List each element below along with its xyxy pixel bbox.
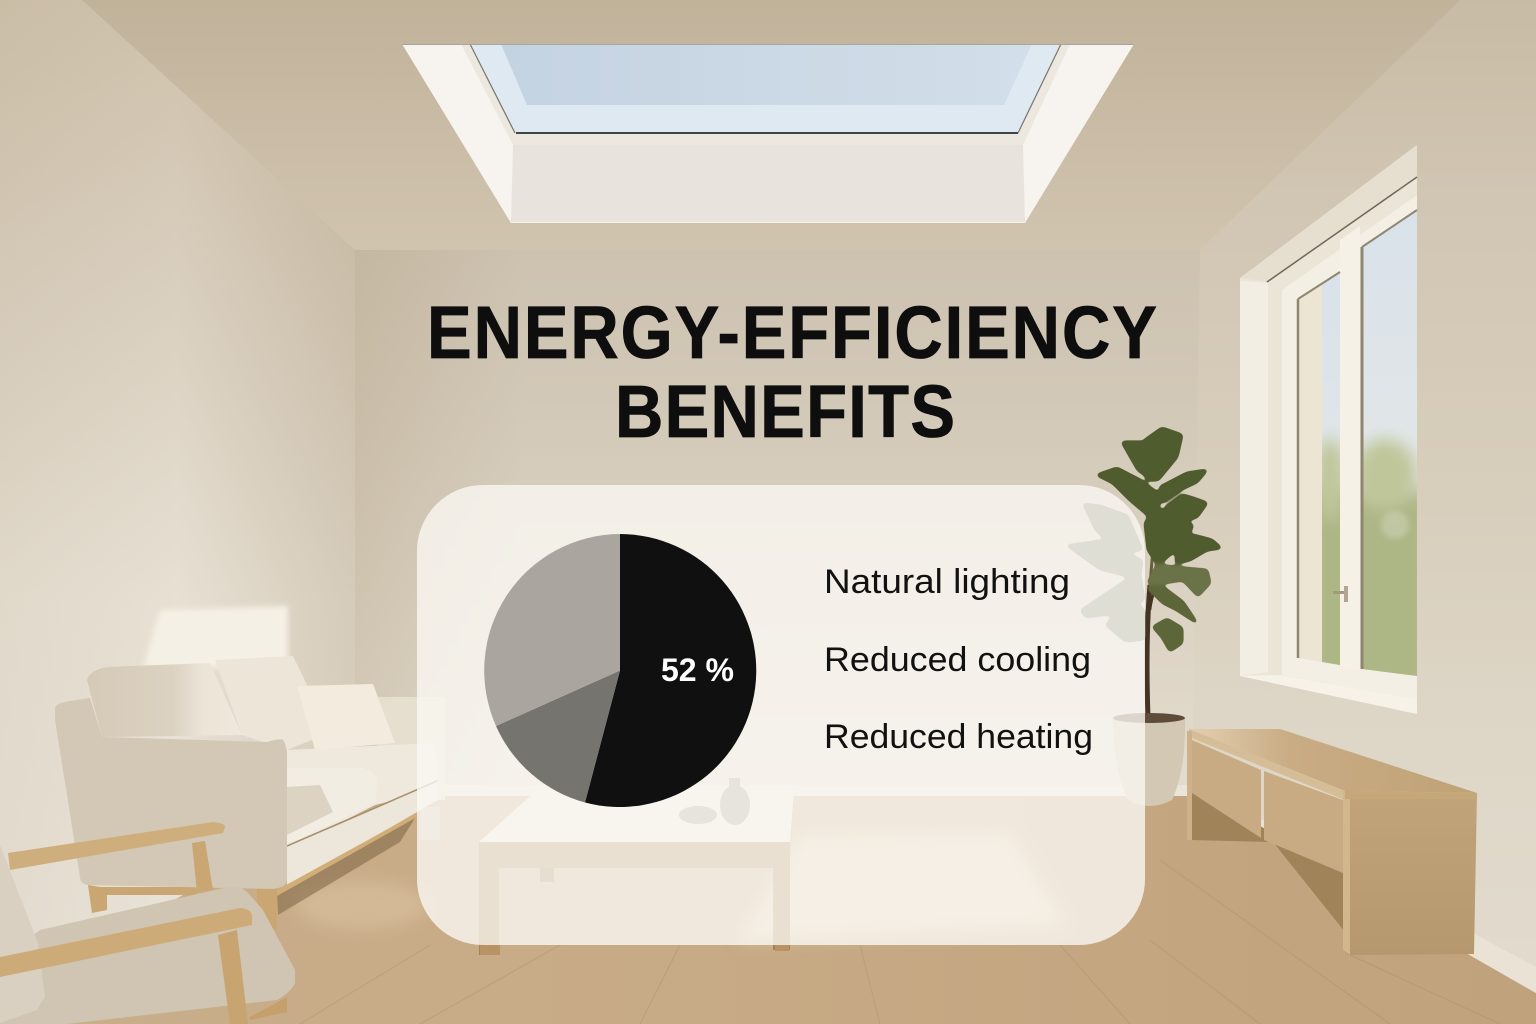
fiddle leaves (1097, 428, 1221, 651)
legend labels: Reduced cooling (824, 641, 1091, 679)
panel: translucent chart card (417, 485, 1145, 945)
legend labels: Natural lighting (824, 563, 1070, 601)
armchair (0, 822, 295, 1024)
side window (1240, 145, 1430, 714)
coffee table (479, 778, 794, 955)
room: right wall (1192, 0, 1536, 993)
title (427, 291, 1159, 453)
pie chart: 52 % (661, 652, 734, 688)
bench (1187, 729, 1477, 955)
legend labels: Reduced heating (824, 718, 1093, 756)
ghost leaves seen through panel (1065, 503, 1145, 642)
title: ENERGY-EFFICIENCY (427, 291, 1159, 374)
sunlight on floor inside panel (740, 833, 1065, 940)
room: ceiling (0, 0, 1536, 250)
legend labels (824, 563, 1093, 756)
trees outside window (1322, 430, 1417, 676)
planter pot (1113, 718, 1185, 806)
pie chart (484, 534, 756, 807)
title: BENEFITS (615, 370, 956, 453)
baseboards (0, 782, 1536, 1000)
vase and bowl (679, 778, 750, 825)
skylight (402, 44, 1134, 223)
sunlight on left wall (143, 606, 288, 668)
plant (1065, 428, 1221, 806)
floor sun patch (296, 881, 428, 929)
floor planks (300, 860, 1500, 1024)
room: back wall (355, 250, 1201, 798)
room: floor (0, 796, 1536, 1024)
sofa (55, 656, 445, 930)
room: left wall (0, 0, 355, 1000)
